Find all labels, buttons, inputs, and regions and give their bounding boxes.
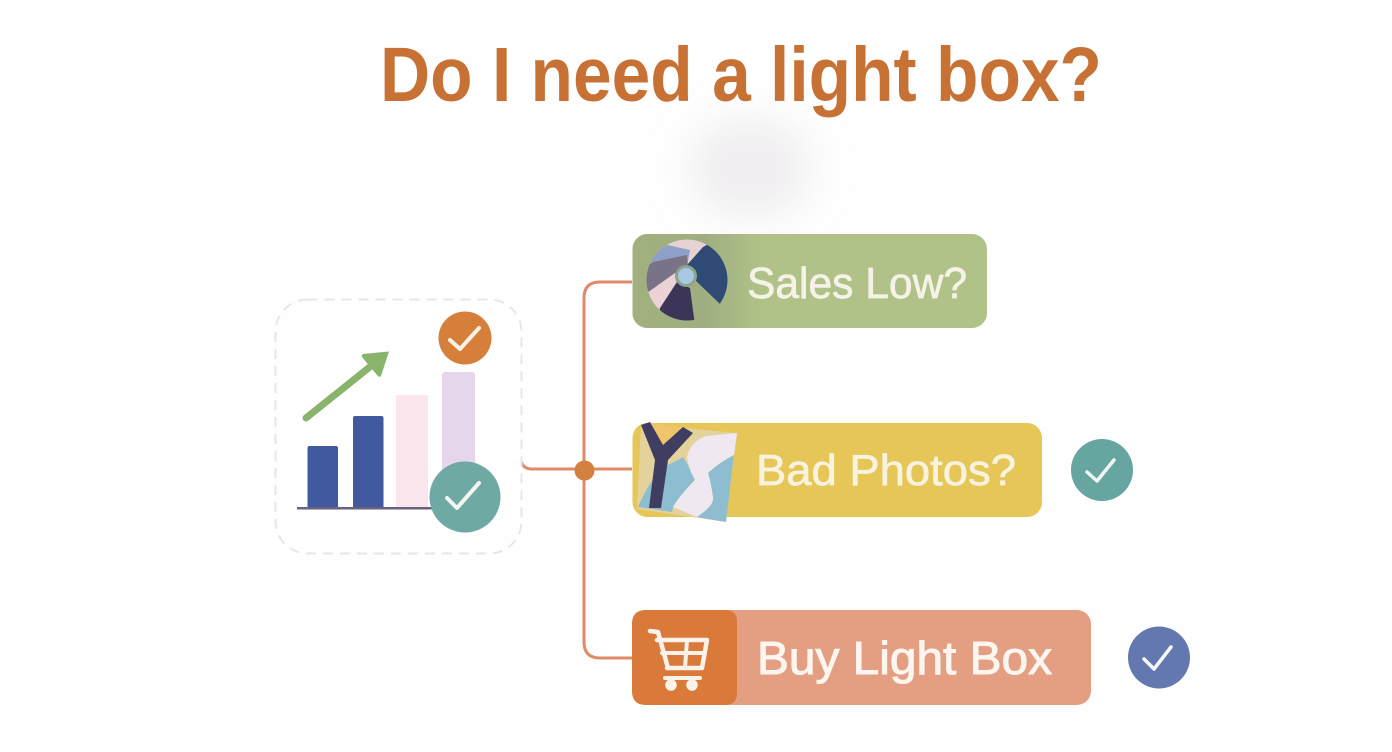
background smudge bbox=[690, 118, 810, 218]
option: Sales Low? bbox=[632, 234, 987, 328]
bar chart bbox=[297, 372, 475, 510]
label: Buy Light Box bbox=[757, 632, 1052, 684]
icon: blue check badge for Buy Light Box bbox=[1128, 626, 1190, 688]
option: Bad Photos? bbox=[632, 422, 1042, 522]
icon: wheel hub bbox=[675, 265, 697, 287]
pill bbox=[632, 234, 987, 328]
label: Bad Photos? bbox=[756, 446, 1016, 495]
infographic bbox=[274, 45, 1190, 705]
icon: growth arrow bbox=[306, 352, 389, 418]
label: Sales Low? bbox=[747, 259, 967, 308]
option: Buy Light Box bbox=[632, 610, 1091, 705]
icon: teal check badge for Bad Photos bbox=[1071, 439, 1133, 501]
pill bbox=[632, 423, 1042, 517]
title: Do I need a light box? bbox=[380, 32, 1102, 118]
pill bbox=[632, 610, 1091, 705]
icon: teal check badge bbox=[430, 462, 500, 532]
icon: photo collage bbox=[637, 422, 737, 522]
icon: shopping cart bbox=[650, 631, 707, 688]
icon tile bbox=[632, 610, 737, 705]
dashed frame bbox=[276, 300, 522, 554]
connector junction dot bbox=[574, 460, 594, 480]
icon: pie wheel bbox=[646, 240, 728, 320]
connector lines bbox=[521, 282, 632, 658]
panel: growth chart bbox=[276, 300, 522, 554]
pill shading bbox=[632, 234, 738, 328]
icon: orange check badge bbox=[438, 312, 492, 364]
